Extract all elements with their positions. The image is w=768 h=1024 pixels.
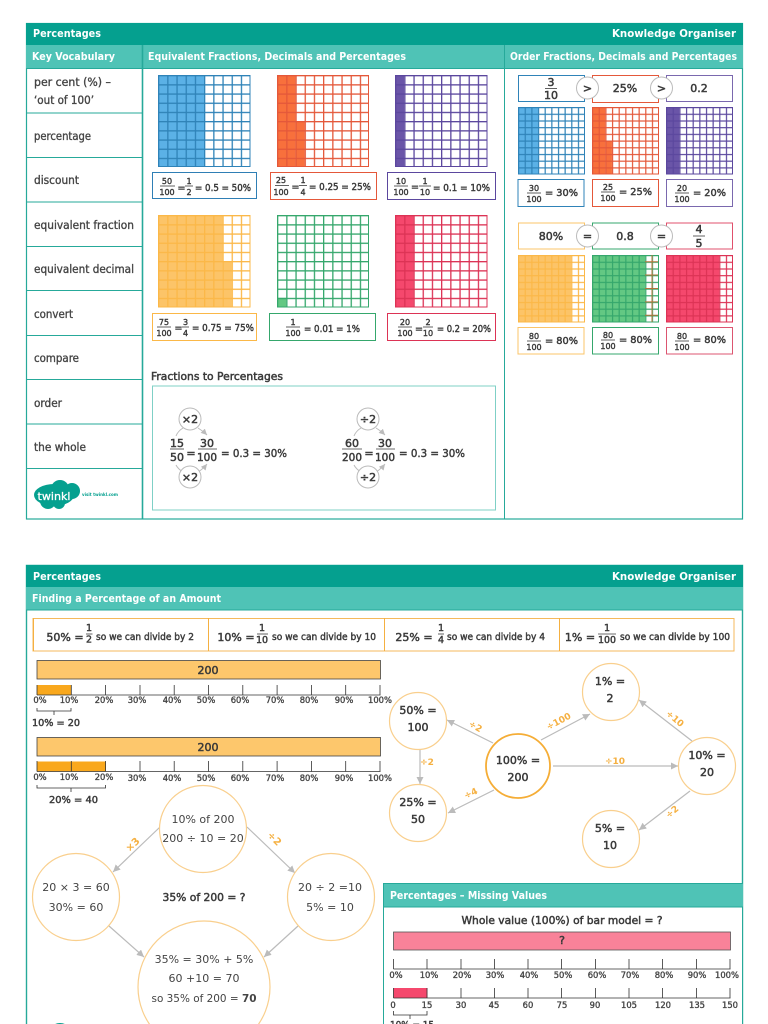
node: ten percent of 200: 10% of 200 — [171, 813, 235, 826]
worked example: multiply by two: 15 — [170, 437, 184, 450]
bar model: unknown whole: ? — [559, 934, 565, 947]
rule: one percent — [565, 623, 730, 646]
header bar: Percentages — [33, 27, 101, 40]
equation: 20 over 100: 2 — [425, 318, 431, 327]
node: result — [138, 921, 270, 1024]
label: 80 percent red: 80 — [677, 332, 687, 341]
equation: 1 over 100: = 0.01 = 1% — [304, 324, 360, 335]
rule: twenty-five percent: 1 — [438, 623, 444, 634]
worked example: multiply by two: 30 — [200, 437, 214, 450]
equation: 10 over 100 — [388, 172, 496, 200]
label: 80 percent yellow: 100 — [526, 343, 542, 352]
title: whole value: Whole value (100%) of bar model = ? — [462, 914, 663, 927]
bar model: ten percent: 100% — [368, 695, 392, 705]
bar model: ten percent: 30% — [128, 695, 146, 705]
bar model: twenty percent: 100% — [368, 773, 392, 783]
bar model: ten percent: 20% — [95, 695, 113, 705]
label: 80 percent yellow: 80 — [529, 332, 539, 341]
bar model: ten percent: 10% = 20 — [32, 718, 80, 729]
panel: key vocabulary: compare — [34, 351, 79, 365]
equation: 50 over 100: 100 — [159, 188, 175, 197]
grid: 25 percent — [277, 75, 369, 167]
node: five percent — [288, 854, 374, 940]
rule: one percent: so we can divide by 100 — [620, 632, 730, 643]
rule: fifty percent — [46, 623, 194, 646]
equation: 50 over 100: = 0.5 = 50% — [195, 183, 251, 194]
panel: key vocabulary: ‘out of 100’ — [34, 93, 94, 107]
equation: 20 over 100: = — [415, 324, 423, 335]
bar model: scale 0 to 150: 90 — [590, 1000, 600, 1010]
comparison row two: = — [583, 230, 592, 243]
header bar — [26, 23, 743, 45]
bar model: twenty percent: 60% — [231, 773, 249, 783]
panel: missing values — [384, 884, 743, 1024]
header bar: Percentages — [33, 570, 101, 583]
equation: 20 over 100: = 0.2 = 20% — [437, 324, 491, 335]
comparison row one: 0.2 — [690, 82, 708, 95]
node: 100 percent: 200 — [508, 771, 528, 784]
bar model: ten percent: 0% — [33, 695, 47, 705]
icon: twinkl logo: twinkl — [38, 490, 70, 503]
panel: key vocabulary: convert — [34, 307, 73, 321]
rule: ten percent: so we can divide by 10 — [272, 632, 376, 643]
rule: twenty-five percent — [395, 623, 545, 646]
bar model: unknown whole: 90% — [688, 970, 706, 980]
worked example: divide by two: 100 — [375, 451, 395, 464]
icon: twinkl logo: visit twinkl.com — [82, 492, 118, 498]
equation: 50 over 100: 2 — [186, 188, 192, 197]
bar model: ten percent: 40% — [163, 695, 181, 705]
panel: fractions to percentages — [152, 386, 496, 510]
label: 80 percent green — [592, 328, 658, 354]
label: 80 percent green: 80 — [603, 331, 613, 340]
bar model: unknown whole: 100% — [715, 970, 739, 980]
bar model: scale 0 to 150: 105 — [621, 1000, 637, 1010]
equation: 10 over 100: 10 — [420, 188, 430, 197]
bar model: twenty percent — [33, 738, 392, 806]
bar model: ten percent: 60% — [231, 695, 249, 705]
heading: missing values: Percentages – Missing Values — [390, 889, 547, 902]
comparison row two: 5 — [696, 237, 702, 250]
comparison row one — [518, 76, 732, 102]
rule: ten percent: 1 — [259, 623, 265, 634]
equation: 25 over 100: = 0.25 = 25% — [309, 182, 371, 193]
bar model: scale 0 to 150: 45 — [489, 1000, 499, 1010]
bar model: twenty percent: 80% — [300, 773, 318, 783]
label: 80 percent red: 100 — [674, 343, 690, 352]
bar model: ten percent — [32, 660, 392, 729]
rule: fifty percent: 2 — [86, 634, 92, 646]
bar model: unknown whole: 60% — [588, 970, 606, 980]
section headings: Key Vocabulary — [32, 50, 115, 63]
grid: 50 percent — [158, 75, 250, 167]
label: 20 percent: 100 — [674, 195, 690, 204]
panel: key vocabulary: discount — [34, 173, 79, 187]
header bar — [26, 565, 743, 587]
panel: key vocabulary: equivalent fraction — [34, 218, 134, 232]
small grid: 25 percent — [592, 107, 658, 174]
node: five percent: 5% = 10 — [306, 901, 354, 914]
diagram: percentage network: ÷10 — [605, 757, 625, 767]
bar model: unknown whole: 40% — [520, 970, 538, 980]
diagram: percentage network: ÷2 — [420, 758, 434, 768]
rule: ten percent: 10% = — [217, 631, 255, 644]
worked example: multiply by two — [170, 408, 287, 488]
small grid: 80 percent red — [666, 255, 732, 322]
label: 25 percent: 100 — [600, 194, 616, 203]
diagram: 35 percent of 200: ×3 — [124, 836, 143, 855]
small grid: 20 percent — [666, 107, 732, 174]
grid: 1 percent — [277, 215, 369, 307]
label: 30 percent: 30 — [529, 184, 539, 193]
rule: twenty-five percent: 4 — [438, 635, 444, 646]
equation: 1 over 100: 1 — [290, 318, 296, 327]
bar model: unknown whole: 10% — [420, 970, 438, 980]
equation: 75 over 100: 100 — [156, 329, 172, 338]
node: 50 percent: 50% = — [399, 704, 437, 717]
node: thirty percent: 20 × 3 = 60 — [42, 881, 110, 894]
comparison row one: 3 — [548, 76, 554, 89]
label: 80 percent green: = 80% — [619, 335, 652, 346]
label: 30 percent — [518, 180, 584, 206]
rule: fifty percent: 50% = — [46, 631, 84, 644]
comparison row two: 80% — [539, 230, 563, 243]
diagram: percentage network — [390, 664, 736, 868]
panel: key vocabulary: the whole — [34, 440, 86, 454]
node: 25 percent — [390, 784, 446, 842]
bar model: unknown whole: 20% — [453, 970, 471, 980]
equation: 25 over 100: 4 — [300, 188, 306, 197]
heading: finding a percentage — [26, 587, 743, 610]
node: result: 60 +10 = 70 — [169, 972, 239, 985]
rule: fifty percent: so we can divide by 2 — [96, 632, 194, 643]
rule: ten percent — [217, 623, 376, 646]
comparison row one: 25% — [613, 82, 637, 95]
worked example: divide by two — [342, 408, 465, 488]
rule: one percent: 1 — [604, 623, 610, 634]
equation: 1 over 100 — [270, 314, 376, 340]
equation: 75 over 100: = 0.75 = 75% — [192, 323, 254, 334]
heading: fractions to percentages: Fractions to Percentages — [151, 370, 283, 383]
equation: 75 over 100: 4 — [183, 329, 188, 338]
label: 25 percent: = 25% — [619, 187, 652, 198]
bar model: scale 0 to 150: 15 — [422, 1000, 432, 1010]
worked example: divide by two: = — [364, 447, 374, 460]
equation: 50 over 100: 50 — [162, 177, 172, 186]
icon: twinkl logo — [34, 480, 118, 509]
worked example: divide by two: ÷2 — [360, 413, 376, 426]
label: 20 percent: 20 — [677, 184, 687, 193]
equation: 75 over 100 — [152, 314, 256, 340]
bar model: ten percent: 80% — [300, 695, 318, 705]
bar model: unknown whole: 50% — [554, 970, 572, 980]
node: 10 percent — [678, 738, 736, 794]
worked example: multiply by two: 50 — [170, 451, 184, 464]
panel: page one organiser — [26, 23, 743, 519]
bar model: scale 0 to 150: 30 — [456, 1000, 466, 1010]
bar model: unknown whole — [389, 932, 739, 980]
node: ten percent of 200: 200 ÷ 10 = 20 — [162, 832, 244, 845]
bar model: ten percent: 200 — [198, 664, 218, 677]
small grid: 30 percent — [518, 107, 584, 174]
bar model: scale 0 to 150: 60 — [523, 1000, 533, 1010]
rule: fifty percent: 1 — [86, 623, 92, 634]
node: 25 percent: 25% = — [399, 796, 437, 809]
label: 30 percent: = 30% — [545, 188, 578, 199]
worked example: divide by two: ÷2 — [360, 471, 376, 484]
bar model: twenty percent: 70% — [266, 773, 284, 783]
panel: order fractions — [518, 76, 732, 354]
rule: one percent: 100 — [598, 635, 616, 646]
header bar: Knowledge Organiser — [612, 27, 737, 40]
equation: 20 over 100 — [388, 314, 496, 340]
equation: 20 over 100: 20 — [400, 318, 410, 327]
equation: 75 over 100: 75 — [159, 318, 169, 327]
label: 20 percent — [666, 180, 732, 206]
diagram: percentage network: ÷10 — [663, 709, 685, 730]
equation: 25 over 100: = — [292, 182, 299, 193]
bar model: twenty percent: 0% — [33, 772, 47, 782]
node: 1 percent: 1% = — [595, 675, 625, 688]
header bar: Knowledge Organiser — [612, 570, 737, 583]
label: 80 percent green: 100 — [600, 342, 616, 351]
bar model: twenty percent: 20% — [95, 772, 113, 782]
label: 25 percent: 25 — [603, 183, 613, 192]
comparison row one: > — [657, 82, 666, 95]
worked example: divide by two: 30 — [378, 437, 392, 450]
comparison row one: 10 — [544, 89, 558, 102]
bar model: twenty percent: 200 — [198, 741, 218, 754]
equation: 20 over 100: 100 — [397, 329, 413, 338]
node: 100 percent — [486, 734, 550, 798]
label: 25 percent — [592, 180, 658, 206]
diagram: percentage network: ÷4 — [463, 787, 480, 802]
node: 100 percent: 100% = — [496, 754, 540, 767]
node: 50 percent — [390, 692, 446, 750]
bar model: twenty percent: 40% — [163, 773, 181, 783]
label: 30 percent: 100 — [526, 195, 542, 204]
bar model: ten percent: 90% — [335, 695, 353, 705]
panel: key vocabulary: per cent (%) – — [34, 75, 111, 89]
equation: 10 over 100: 1 — [422, 177, 428, 186]
rule: ten percent: 10 — [256, 635, 268, 646]
panel: equivalent fractions — [152, 75, 496, 340]
label: 80 percent yellow — [518, 328, 584, 354]
comparison row two: 4 — [696, 223, 702, 236]
equation: 50 over 100 — [152, 172, 256, 198]
bar model: unknown whole: 30% — [486, 970, 504, 980]
bar model: ten percent: 70% — [266, 695, 284, 705]
node: thirty percent: 30% = 60 — [49, 901, 103, 914]
node: five percent: 20 ÷ 2 =10 — [298, 881, 362, 894]
panel: page two organiser — [26, 565, 743, 1024]
bar model: twenty percent: 50% — [197, 773, 215, 783]
bar model: scale 0 to 150: 135 — [689, 1000, 705, 1010]
label: 20 percent: = 20% — [693, 188, 726, 199]
comparison row two: = — [657, 230, 666, 243]
panel: key vocabulary: order — [34, 396, 62, 410]
rule: one percent: 1% = — [565, 631, 595, 644]
bar model: scale 0 to 150: 120 — [655, 1000, 671, 1010]
worked example: multiply by two: = — [186, 447, 196, 460]
node: 5 percent: 5% = — [595, 822, 625, 835]
diagram: percentage network: ÷2 — [467, 719, 483, 735]
equation: 50 over 100: 1 — [186, 177, 192, 186]
bar model: scale 0 to 150: 75 — [557, 1000, 567, 1010]
rule: twenty-five percent: 25% = — [395, 631, 433, 644]
equation: 25 over 100: 1 — [300, 176, 306, 185]
bar model: ten percent: 10% — [60, 695, 78, 705]
equation: 50 over 100: = — [178, 183, 185, 194]
comparison row two: 0.8 — [616, 230, 634, 243]
node: 5 percent — [582, 810, 640, 868]
heading: finding a percentage: Finding a Percentage of an Amount — [32, 592, 221, 605]
equation: 25 over 100: 25 — [276, 176, 286, 185]
icon: twinkl logo top — [52, 1023, 68, 1024]
label: 80 percent red — [666, 328, 732, 354]
bar model: scale 0 to 150: 0 — [390, 1000, 396, 1010]
grid: 20 percent — [395, 215, 487, 307]
grid: 75 percent — [158, 215, 250, 307]
worked example: multiply by two: ×2 — [182, 413, 198, 426]
node: result: 35% = 30% + 5% — [155, 953, 253, 966]
node: 5 percent: 10 — [603, 839, 617, 852]
label: 80 percent yellow: = 80% — [545, 336, 578, 347]
grid: 10 percent — [395, 75, 487, 167]
bar model: scale 0 to 150 — [390, 988, 738, 1024]
equation: 10 over 100: = 0.1 = 10% — [433, 183, 490, 194]
node: 50 percent: 100 — [408, 721, 428, 734]
equation: 10 over 100: 100 — [393, 188, 409, 197]
diagram: 35 percent of 200: ÷2 — [264, 830, 283, 849]
worked example: multiply by two: 100 — [197, 451, 217, 464]
panel: divide rules — [33, 618, 734, 651]
equation: 10 over 100: = — [411, 182, 419, 193]
bar model: scale 0 to 150: 150 — [722, 1000, 738, 1010]
node: 10 percent: 10% = — [688, 749, 726, 762]
bar model: twenty percent: 90% — [335, 773, 353, 783]
bar model: twenty percent: 10% — [60, 772, 78, 782]
bar model: unknown whole: 80% — [655, 970, 673, 980]
question: 35 percent of 200: 35% of 200 = ? — [162, 891, 246, 904]
comparison row one: > — [583, 82, 592, 95]
small grid: 80 percent green — [592, 255, 658, 322]
diagram: percentage network: ÷100 — [545, 712, 573, 733]
worked example: multiply by two: = 0.3 = 30% — [221, 447, 287, 460]
panel: key vocabulary: percentage — [34, 129, 91, 143]
diagram: 35 percent of 200 — [32, 786, 374, 1024]
bar model: unknown whole: 70% — [621, 970, 639, 980]
worked example: divide by two: 60 — [345, 437, 359, 450]
equation: 10 over 100: 10 — [396, 177, 406, 186]
node: 25 percent: 50 — [411, 813, 425, 826]
node: thirty percent — [32, 854, 120, 940]
bar model: unknown whole: 0% — [389, 970, 403, 980]
equation: 25 over 100 — [270, 172, 376, 200]
equation: 1 over 100: 100 — [285, 329, 301, 338]
section headings: Equivalent Fractions, Decimals and Percentages — [148, 50, 406, 63]
bar model: twenty percent: 20% = 40 — [49, 795, 98, 806]
node: 1 percent: 2 — [606, 692, 614, 705]
panel: key vocabulary — [26, 75, 142, 509]
section headings — [26, 45, 743, 68]
worked example: multiply by two: ×2 — [182, 471, 198, 484]
bar model: twenty percent: 30% — [128, 773, 146, 783]
node: ten percent of 200 — [160, 786, 246, 872]
equation: 75 over 100: = — [174, 323, 182, 334]
node: 10 percent: 20 — [700, 766, 714, 779]
panel: key vocabulary: equivalent decimal — [34, 262, 134, 276]
equation: 20 over 100: 10 — [423, 329, 433, 338]
diagram: percentage network: ÷2 — [664, 804, 681, 821]
label: 80 percent red: = 80% — [693, 335, 726, 346]
worked example: divide by two: 200 — [342, 451, 362, 464]
node: result: so 35% of 200 = 70 — [152, 992, 257, 1005]
heading: missing values — [384, 884, 743, 907]
rule: twenty-five percent: so we can divide by 4 — [447, 632, 545, 643]
equation: 75 over 100: 3 — [183, 318, 188, 327]
comparison row two — [518, 223, 732, 250]
node: 1 percent — [582, 664, 640, 720]
worked example: divide by two: = 0.3 = 30% — [399, 447, 465, 460]
equation: 25 over 100: 100 — [273, 188, 289, 197]
small grid: 80 percent yellow — [518, 255, 584, 322]
bar model: ten percent: 50% — [197, 695, 215, 705]
